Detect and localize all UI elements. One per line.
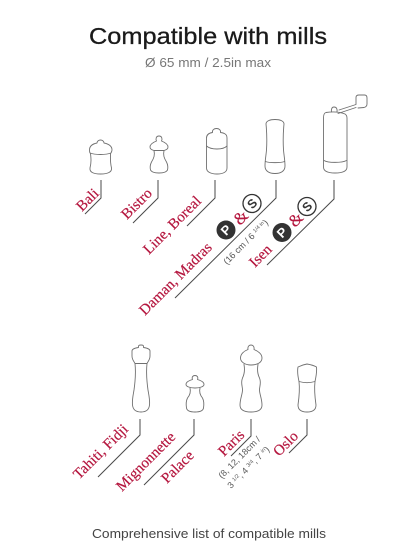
leader: Isen xyxy=(267,180,334,265)
label: Bali: Bali xyxy=(74,186,103,215)
size note: Paris: 3 xyxy=(225,480,236,490)
size note: Paris: , 4 xyxy=(236,464,252,480)
ampersand: & xyxy=(284,208,307,231)
size note: Paris: 3/4 xyxy=(246,459,255,469)
mill: Line, Boreal xyxy=(141,128,227,258)
size note: Daman, Madras: (16 cm / 6 xyxy=(221,231,257,266)
leader: Bistro xyxy=(133,180,158,223)
label: Paris: Paris xyxy=(216,427,248,460)
size note: Paris: , 7 xyxy=(250,450,266,465)
mill: Bali xyxy=(74,140,112,215)
leader: Oslo xyxy=(289,419,307,453)
size note: Paris: in xyxy=(260,447,267,454)
mill: Isen xyxy=(247,95,367,271)
label: Tahiti, Fidji: Tahiti, Fidji xyxy=(71,422,132,483)
leader: Paris xyxy=(231,419,251,456)
leader: Tahiti, Fidji xyxy=(98,419,140,477)
label: Mignonnette: Mignonnette xyxy=(114,429,179,495)
title: Compatible with mills xyxy=(89,23,327,49)
size note: Paris xyxy=(216,434,271,490)
footer caption: Comprehensive list of compatible mills xyxy=(92,526,327,541)
leader: Bali xyxy=(85,180,101,214)
label: Line, Boreal: Line, Boreal xyxy=(141,193,205,258)
label: Isen: Isen xyxy=(247,241,276,271)
mill: Daman, Madras xyxy=(137,120,285,319)
mill: Bistro xyxy=(119,136,168,223)
icon: S badge: S xyxy=(299,199,315,215)
label: Bistro: Bistro xyxy=(119,186,156,223)
size note: Paris: (8, 12, 18cm / xyxy=(216,434,263,480)
mill: Paris xyxy=(216,345,271,490)
leader: Mignonnette, Palace xyxy=(144,419,194,485)
label: Oslo: Oslo xyxy=(271,428,302,460)
subtitle: maximum diameter: Ø 65 mm / 2.5in max xyxy=(145,56,272,70)
icon: P badge: P xyxy=(274,224,291,241)
mill: Tahiti, Fidji xyxy=(71,345,150,483)
label: Daman, Madras: Daman, Madras xyxy=(137,240,216,319)
size note: Paris: ) xyxy=(262,444,271,454)
ampersand: & xyxy=(229,206,252,229)
icon: S badge: S xyxy=(244,196,260,212)
leader: Daman, Madras xyxy=(175,180,276,298)
mill: Oslo xyxy=(271,364,317,460)
label: Palace: Palace xyxy=(159,448,198,487)
size note: Paris: 1/2 xyxy=(231,473,241,483)
mill: Mignonnette, Palace xyxy=(114,376,204,495)
leader: Line, Boreal xyxy=(187,180,215,226)
size note: Daman, Madras: ) xyxy=(261,218,270,227)
icon: P badge: P xyxy=(218,221,235,238)
size note: Daman, Madras: 1/4 in xyxy=(252,220,266,234)
